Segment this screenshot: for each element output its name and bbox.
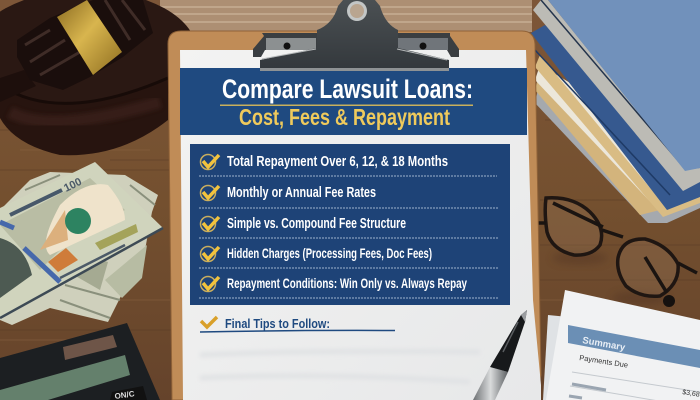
item 4: Hidden Charges (Processing Fees, Doc Fees) <box>227 245 432 261</box>
clipboard <box>168 31 541 400</box>
right lens <box>618 239 678 296</box>
summary band: Summary <box>581 335 627 354</box>
white paper layer <box>535 65 700 212</box>
item 2 <box>200 185 376 201</box>
item 3: Simple vs. Compound Fee Structure <box>227 216 406 232</box>
top bill <box>0 162 163 318</box>
paper sheet <box>180 50 541 400</box>
gold band <box>57 0 122 75</box>
folders and book stack <box>531 0 700 223</box>
gavel head <box>17 0 153 90</box>
second tan layer <box>535 70 700 215</box>
item 4 <box>200 245 432 262</box>
item 3 <box>200 216 406 232</box>
solar panel <box>63 335 117 360</box>
blue book cover <box>548 0 700 171</box>
checklist panel <box>190 144 510 305</box>
on/clear key <box>110 386 147 400</box>
item 1: Total Repayment Over 6, 12, & 18 Months <box>227 154 448 170</box>
bills underneath <box>0 172 158 325</box>
clip body <box>260 0 449 71</box>
metal clipboard clip <box>253 0 459 71</box>
header band <box>180 68 527 135</box>
gavel and sound block <box>0 0 197 155</box>
final tips heading: Final Tips to Follow: <box>225 317 330 331</box>
book pages <box>533 0 700 191</box>
item 5: Repayment Conditions: Win Only vs. Always Repay <box>227 276 467 291</box>
bridge and arms <box>538 203 697 293</box>
summary band <box>568 325 700 368</box>
item 5 <box>200 276 467 292</box>
calculator <box>0 323 160 400</box>
left lens <box>545 198 602 255</box>
title: Compare Lawsuit Loans: <box>222 74 473 104</box>
final tips heading <box>200 317 395 332</box>
blue folder <box>531 25 700 210</box>
display <box>0 355 130 400</box>
bill green seal <box>65 208 91 234</box>
clip ring <box>347 1 367 21</box>
bill portrait <box>0 238 32 298</box>
stack of hundred dollar bills <box>0 162 163 325</box>
payment amount: $3,68 <box>682 389 700 399</box>
payments due label: Payments Due <box>579 353 629 370</box>
tan layer <box>535 55 700 217</box>
gavel handle <box>0 70 36 102</box>
subtitle: Cost, Fees & Repayment <box>239 104 450 130</box>
gray bottom layer <box>535 80 700 223</box>
bill gold numerals <box>95 224 138 250</box>
sound block <box>0 0 197 155</box>
hinge arms <box>253 33 459 57</box>
bill value: 100 <box>62 176 84 195</box>
pen <box>473 310 527 400</box>
summary document <box>543 290 700 400</box>
eyeglasses <box>538 198 697 307</box>
item 2: Monthly or Annual Fee Rates <box>227 185 376 201</box>
bill orange mark <box>48 248 78 272</box>
